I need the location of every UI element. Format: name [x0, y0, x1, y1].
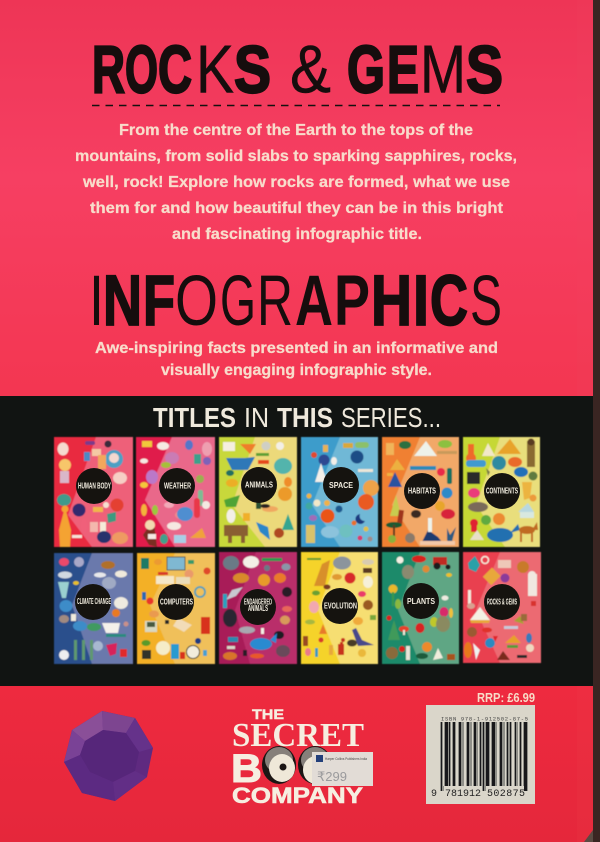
book: Continents [463, 437, 540, 547]
heading: Infographics: S [470, 262, 502, 341]
title: Rocks & Gems: S [234, 32, 271, 108]
barcode: 9 [431, 789, 437, 800]
book: Human Body [54, 437, 133, 547]
icon: left eye [262, 746, 296, 784]
text block: book description: From the centre of the Earth to the tops of the [119, 122, 473, 139]
text block: book description: well, rock! Explore how rocks are formed, what we use [82, 174, 510, 191]
book: Continents: CONTINENTS [486, 486, 518, 496]
title: Rocks & Gems [92, 32, 503, 108]
heading: Infographics: I [413, 262, 429, 341]
heading: Infographics: O [175, 262, 218, 341]
price label: RRP: £6.99 [477, 690, 535, 705]
book: Climate Change [54, 553, 133, 664]
title: Rocks & Gems: & [290, 32, 331, 108]
logo word: Company: COMPANY [232, 783, 363, 808]
book: Animals [219, 437, 297, 547]
price sticker: Harper Collins Publishers India [325, 757, 367, 761]
title: Rocks & Gems: G [347, 32, 385, 108]
title: Rocks & Gems: R [92, 32, 125, 108]
heading: Infographics: P [334, 262, 370, 341]
book: Evolution: EVOLUTION [324, 602, 357, 610]
price sticker: ₹299 [317, 769, 347, 784]
logo letter: B: B [231, 747, 262, 791]
book grid [54, 437, 541, 664]
text block: book description [75, 122, 517, 243]
book: Endangered Animals [219, 552, 297, 664]
book: Evolution [301, 552, 378, 664]
text block: book description: and fascinating infographic title. [172, 226, 422, 243]
title: Rocks & Gems: K [196, 32, 234, 108]
heading: titles in this series [153, 402, 441, 433]
book: Rocks & Gems: ROCKS & GEMS [487, 598, 517, 606]
spine edge on the right [577, 0, 600, 842]
barcode [426, 705, 535, 804]
logo word: Secret: SECRET [232, 717, 364, 754]
barcode: 781912 [445, 789, 481, 800]
panel: lower cover background [0, 686, 600, 842]
text block: book description: mountains, from solid slabs to sparking sapphires, rocks, [75, 148, 517, 165]
book: Endangered Animals: ENDANGERED [244, 598, 272, 606]
heading: Infographics [89, 262, 502, 341]
book: Human Body: HUMAN BODY [78, 482, 111, 490]
heading: Infographics: I [89, 262, 104, 341]
heading: titles in this series: SERIES... [341, 402, 441, 433]
logo: The Secret Book Company [231, 706, 373, 808]
book: Weather [136, 437, 215, 547]
title: Rocks & Gems: E [387, 32, 419, 108]
icon: purple gem [64, 711, 153, 801]
title: Rocks & Gems: S [466, 32, 503, 108]
text block: series tagline: visually engaging infographic style. [161, 362, 432, 379]
text block: book description: them for and how beautiful they can be in this bright [90, 200, 504, 217]
price sticker [312, 752, 373, 786]
barcode: ISBN 978-1-912502-87-5 [441, 716, 528, 722]
heading: Infographics: G [220, 262, 256, 341]
heading: Infographics: C [430, 262, 468, 341]
icon: right eye [298, 746, 332, 784]
heading: titles in this series: IN [244, 402, 269, 433]
heading: Infographics: H [371, 262, 412, 341]
book: Habitats: HABITATS [408, 486, 436, 496]
heading: titles in this series: THIS [277, 402, 333, 433]
book: Space [301, 437, 379, 547]
text block: series tagline: Awe-inspiring facts presented in an informative and [95, 340, 498, 357]
panel: upper cover background [0, 0, 600, 397]
heading: Infographics: N [103, 262, 142, 341]
book: Habitats [382, 437, 459, 547]
title: Rocks & Gems: M [420, 32, 466, 108]
book: Climate Change: CLIMATE CHANGE [77, 597, 111, 606]
panel: black series band [0, 396, 600, 686]
book: Plants: PLANTS [407, 597, 436, 606]
book: Computers: COMPUTERS [160, 598, 193, 606]
logo word: The: THE [252, 706, 284, 722]
heading: titles in this series: TITLES [153, 402, 236, 433]
book: Space: SPACE [329, 481, 354, 490]
text block: series tagline [95, 340, 498, 379]
title: Rocks & Gems: O [125, 32, 158, 108]
book: Computers [137, 553, 215, 664]
book: Endangered Animals: ANIMALS [248, 604, 268, 613]
barcode: 502875 [487, 789, 525, 800]
book: Weather: WEATHER [164, 482, 191, 490]
dashed divider [92, 104, 500, 106]
title: Rocks & Gems: C [158, 32, 192, 108]
heading: Infographics: A [295, 262, 333, 341]
book: Animals: ANIMALS [245, 480, 274, 490]
book: Rocks & Gems [463, 552, 541, 663]
heading: Infographics: F [143, 262, 175, 341]
heading: Infographics: R [257, 262, 293, 341]
book: Plants [382, 552, 459, 664]
